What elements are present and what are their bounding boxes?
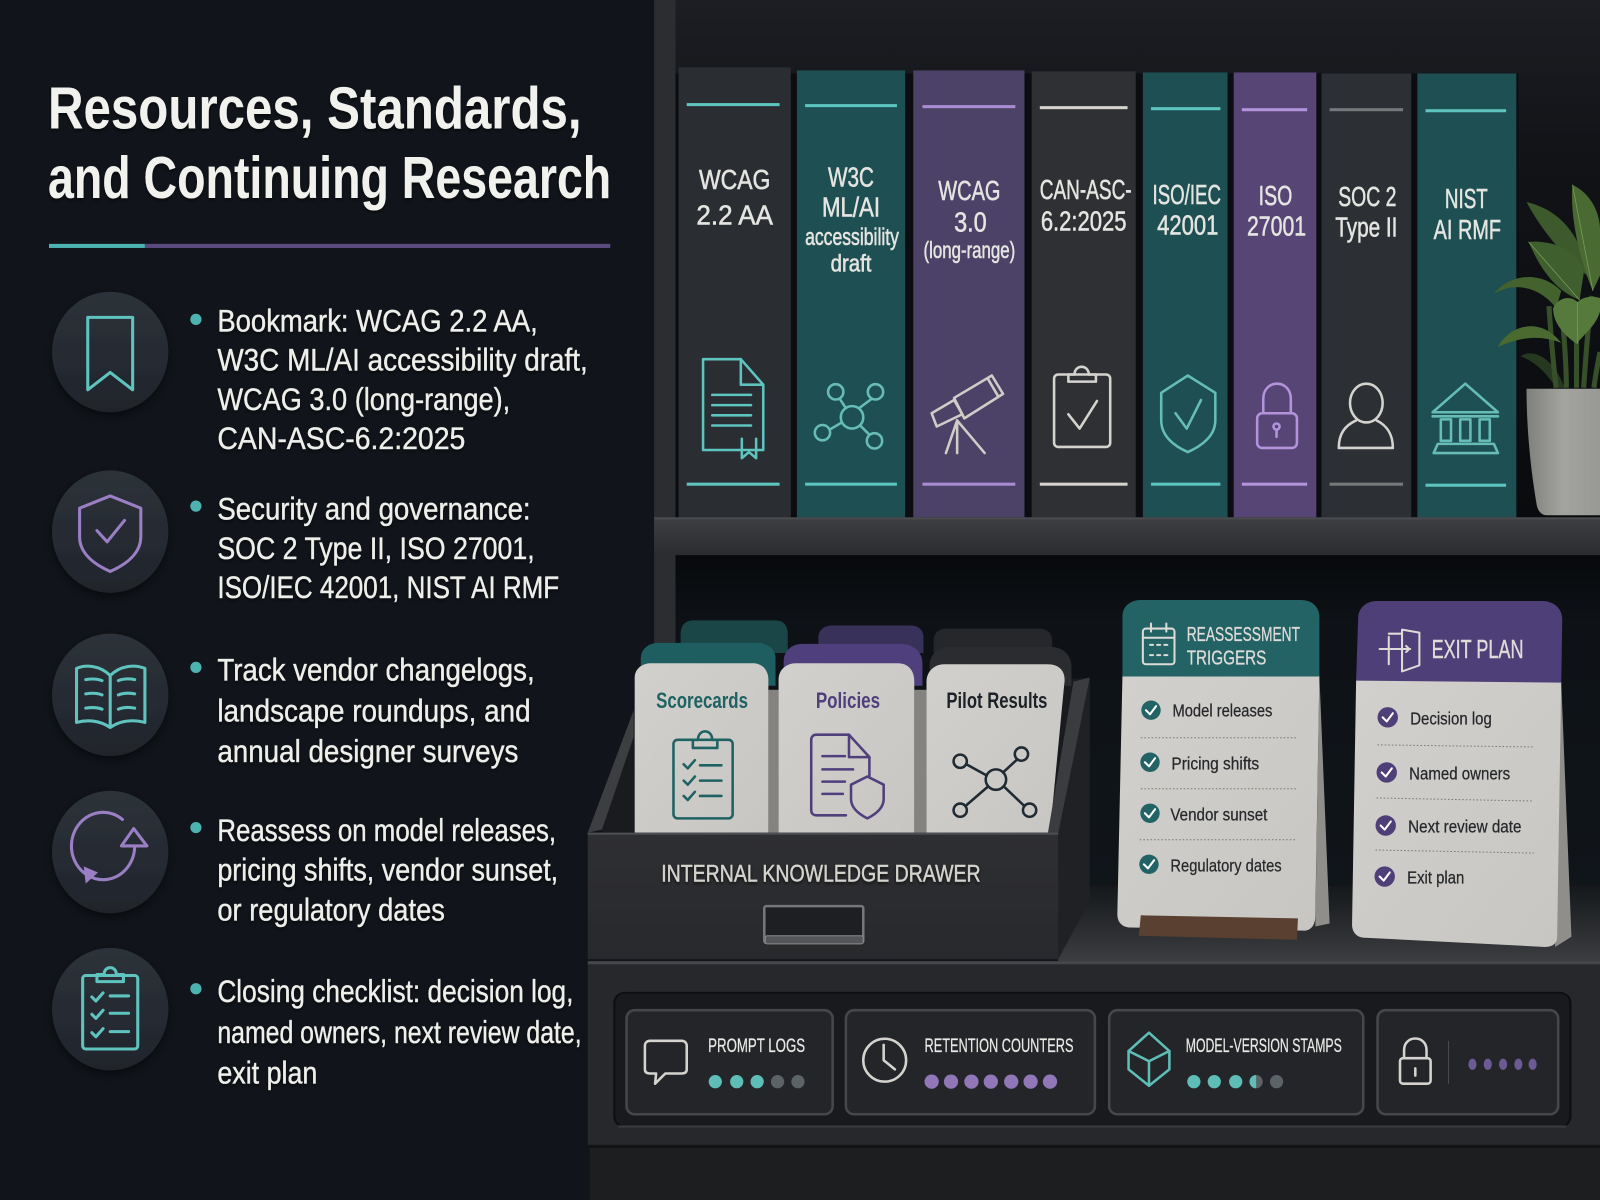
book: SOC 2 Type II	[1321, 73, 1411, 517]
trigger rows: Pricing shifts	[1171, 753, 1259, 773]
drawer handle	[764, 906, 863, 944]
plant	[1494, 185, 1600, 515]
card: scorecards	[635, 663, 768, 833]
card: policies	[779, 663, 914, 833]
security text: ISO/IEC 42001, NIST AI RMF	[217, 569, 559, 605]
bottom surface	[1058, 886, 1600, 963]
card body	[1352, 680, 1561, 947]
book: WCAG 3.0: 3.0	[954, 207, 987, 238]
bookmark text: W3C ML/AI accessibility draft,	[217, 341, 588, 377]
status tray	[614, 993, 1570, 1127]
card header	[1356, 601, 1562, 683]
bookmark text	[217, 303, 588, 456]
card: policies: Policies	[816, 688, 880, 713]
icon: shield	[52, 470, 168, 593]
icon: institution	[1433, 384, 1498, 453]
book: W3C ML/AI accessibility draft: W3C	[828, 162, 874, 193]
icon: telescope	[932, 376, 1003, 453]
book: W3C ML/AI accessibility draft: ML/AI	[822, 191, 880, 222]
card header: EXIT PLAN	[1432, 636, 1523, 664]
wooden stand	[1139, 915, 1298, 940]
drawer right wall	[1058, 678, 1090, 959]
exit plan rows: Named owners	[1409, 764, 1510, 784]
item: reassess	[52, 791, 558, 927]
trigger rows: Regulatory dates	[1170, 855, 1282, 875]
icon: door	[1380, 630, 1419, 671]
book: CAN-ASC-6.2:2025: CAN-ASC-	[1040, 174, 1132, 205]
internal knowledge drawer	[588, 620, 1090, 959]
item: track	[52, 634, 535, 769]
trigger rows: Model releases	[1172, 700, 1273, 720]
book: ISO/IEC 42001	[1143, 72, 1228, 517]
icon: network	[815, 384, 883, 448]
book: W3C ML/AI accessibility draft: accessibility	[805, 224, 900, 251]
icon: clipboard	[52, 948, 168, 1070]
exit plan rows: Decision log	[1410, 708, 1492, 728]
plant pot	[1527, 389, 1600, 515]
status dots	[924, 1074, 1057, 1089]
title	[48, 75, 611, 211]
status dots	[1187, 1075, 1283, 1088]
bookmark text: WCAG 3.0 (long-range),	[217, 381, 510, 417]
book: NIST AI RMF: AI RMF	[1434, 214, 1501, 245]
track text: Track vendor changelogs,	[217, 652, 535, 688]
icon: document	[703, 359, 763, 458]
icon: cube	[1129, 1033, 1169, 1086]
book: WCAG 2.2 AA: 2.2 AA	[696, 199, 774, 230]
bookmark text: CAN-ASC-6.2:2025	[217, 420, 465, 456]
module: model-version stamps: MODEL-VERSION STAMPS	[1186, 1035, 1342, 1057]
card: exit plan	[1352, 601, 1571, 947]
book: WCAG 2.2 AA: WCAG	[699, 164, 770, 195]
icon: person	[1339, 384, 1393, 448]
closing checklist text	[217, 973, 582, 1091]
icon: refresh cycle	[52, 791, 168, 913]
security text: Security and governance:	[217, 490, 531, 526]
card header: REASSESSMENT	[1187, 624, 1300, 646]
reassess text: pricing shifts, vendor sunset,	[217, 852, 558, 888]
icon: shield check	[1161, 376, 1215, 452]
item: bookmark	[52, 292, 588, 456]
module: retention counters: RETENTION COUNTERS	[924, 1035, 1074, 1057]
book: ISO/IEC 42001: 42001	[1157, 210, 1218, 241]
icon: checklist	[673, 731, 733, 818]
reassess text	[217, 812, 558, 927]
drawer back	[602, 678, 1090, 833]
book: W3C ML/AI accessibility draft: draft	[831, 250, 872, 277]
card header	[1122, 600, 1319, 677]
card: pilot results: Pilot Results	[946, 688, 1047, 713]
book: ISO/IEC 42001: ISO/IEC	[1153, 179, 1221, 210]
top shelf board	[654, 517, 1600, 555]
lower cabinet	[588, 961, 1600, 1200]
icon: clipboard check	[1054, 367, 1110, 447]
item: closing checklist	[52, 948, 582, 1091]
closing checklist text: named owners, next review date,	[217, 1014, 582, 1050]
icon: padlock	[1257, 384, 1297, 448]
module: retention counters	[846, 1010, 1095, 1114]
icon: clock	[863, 1039, 906, 1082]
title divider	[49, 244, 610, 248]
icon: calendar	[1143, 623, 1174, 664]
plant leaves	[1494, 185, 1600, 388]
reassess text: Reassess on model releases,	[217, 812, 556, 848]
icon: nodes	[954, 747, 1036, 817]
book: ISO 27001: ISO	[1259, 180, 1292, 211]
title: and Continuing Research	[48, 144, 611, 211]
reassess text: or regulatory dates	[217, 891, 445, 927]
book: SOC 2 Type II: SOC 2	[1338, 181, 1396, 212]
card: reassessment triggers	[1117, 600, 1330, 940]
top shelf books	[679, 67, 1516, 517]
module: lock	[1378, 1010, 1558, 1114]
card: pilot results	[927, 664, 1065, 833]
exit plan rows: Exit plan	[1407, 868, 1464, 888]
divider tabs	[641, 620, 1071, 686]
book: WCAG 2.2 AA	[679, 67, 791, 517]
icon: chat bubble	[645, 1041, 687, 1084]
book: CAN-ASC-6.2:2025: 6.2:2025	[1041, 206, 1127, 237]
book: ISO 27001	[1234, 72, 1316, 517]
book: NIST AI RMF	[1417, 73, 1516, 517]
icon: open book	[52, 634, 168, 756]
book: ISO 27001: 27001	[1247, 211, 1306, 242]
drawer label: INTERNAL KNOWLEDGE DRAWER	[661, 861, 981, 888]
trigger rows	[1139, 700, 1296, 875]
card header: TRIGGERS	[1187, 647, 1266, 669]
book: WCAG 3.0: (long-range)	[923, 237, 1015, 263]
drawer left wall	[588, 710, 634, 833]
security text	[217, 490, 559, 605]
card: scorecards: Scorecards	[656, 688, 748, 713]
bookmark text: Bookmark: WCAG 2.2 AA,	[217, 303, 538, 339]
module: model-version stamps	[1109, 1010, 1363, 1114]
security text: SOC 2 Type II, ISO 27001,	[217, 530, 535, 566]
book: WCAG 3.0	[913, 70, 1024, 517]
drawer front	[588, 833, 1058, 959]
module: prompt logs	[627, 1010, 833, 1114]
icon: policy document	[811, 735, 884, 818]
module: prompt logs: PROMPT LOGS	[708, 1035, 805, 1057]
title: Resources, Standards,	[48, 75, 582, 142]
icon: lock	[1400, 1039, 1431, 1084]
card body	[1117, 676, 1319, 931]
exit plan rows	[1374, 707, 1535, 888]
track text	[217, 652, 535, 769]
status dots	[1468, 1059, 1537, 1070]
book: CAN-ASC-6.2:2025	[1032, 71, 1136, 517]
book: WCAG 3.0: WCAG	[938, 175, 1001, 206]
track text: annual designer surveys	[217, 733, 518, 769]
closing checklist text: exit plan	[217, 1055, 317, 1091]
status dots	[709, 1075, 805, 1088]
book: NIST AI RMF: NIST	[1445, 183, 1488, 214]
icon: bookmark	[52, 292, 168, 412]
item: security	[52, 470, 559, 605]
exit plan rows: Next review date	[1408, 817, 1521, 837]
book: SOC 2 Type II: Type II	[1335, 212, 1397, 243]
trigger rows: Vendor sunset	[1170, 804, 1267, 824]
closing checklist text: Closing checklist: decision log,	[217, 973, 573, 1009]
track text: landscape roundups, and	[217, 692, 531, 728]
book: W3C ML/AI accessibility draft	[797, 70, 905, 517]
